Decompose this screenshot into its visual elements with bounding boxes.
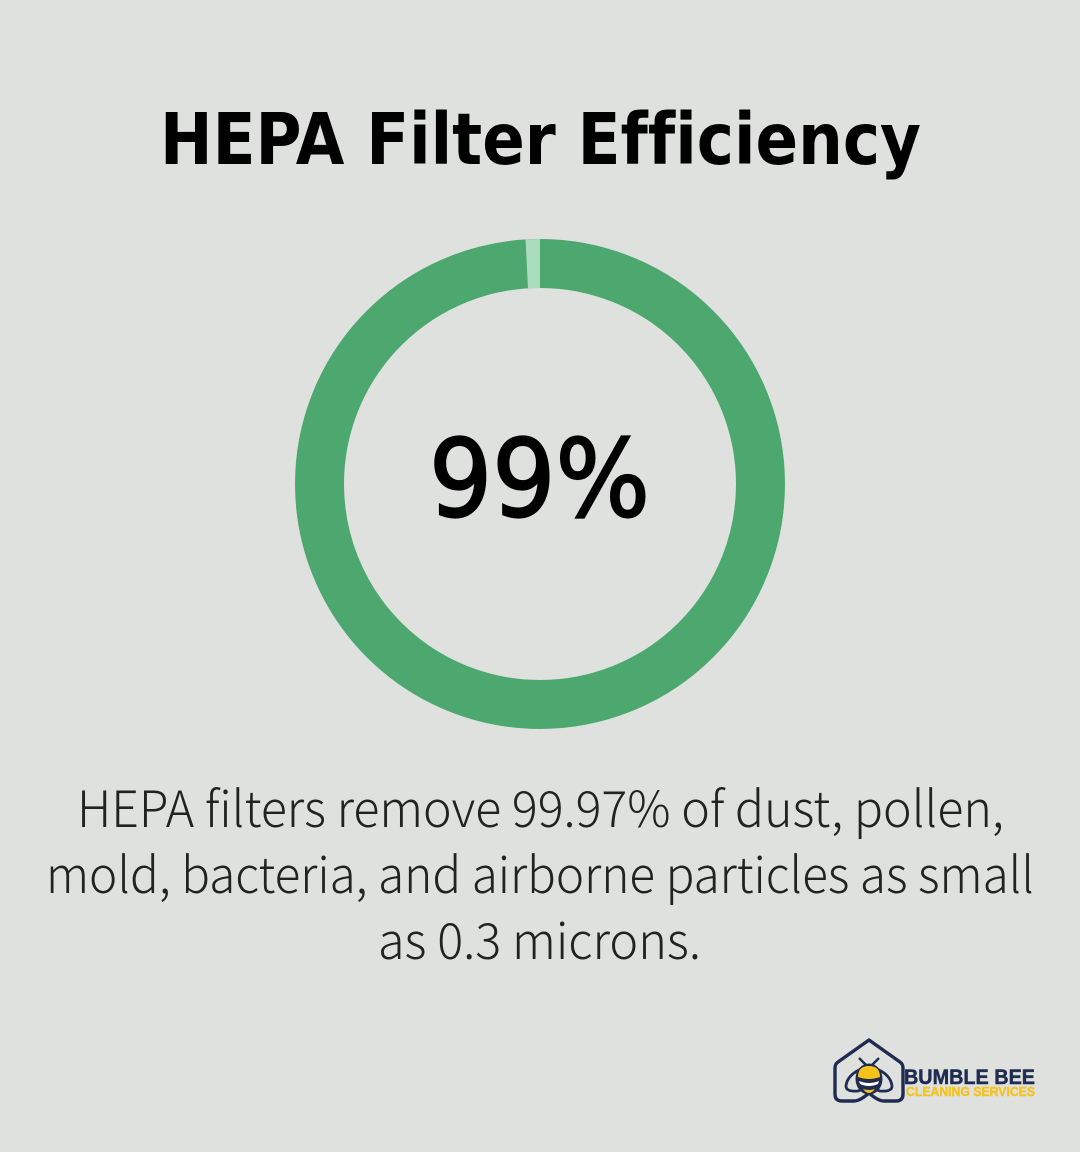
- logo wordmark: BUMBLE BEE: [904, 1066, 1035, 1089]
- title: HEPA Filter Efficiency: [160, 98, 921, 181]
- ring: remaining segment: [526, 239, 540, 288]
- description text: [46, 770, 1034, 974]
- logo tagline: CLEANING SERVICES: [906, 1085, 1035, 1099]
- icon: bee: [846, 1058, 892, 1094]
- description text: HEPA filters remove 99.97% of dust, pollen,: [77, 770, 1004, 842]
- icon: house outline: [835, 1040, 903, 1101]
- center value: 99%: [429, 418, 650, 542]
- description text: mold, bacteria, and airborne particles as small: [46, 836, 1034, 908]
- description text: as 0.3 microns.: [378, 902, 701, 974]
- donut chart: [320, 239, 760, 704]
- logo: Bumble Bee Cleaning Services: [835, 1040, 1035, 1101]
- ring: 99% segment: [320, 264, 760, 704]
